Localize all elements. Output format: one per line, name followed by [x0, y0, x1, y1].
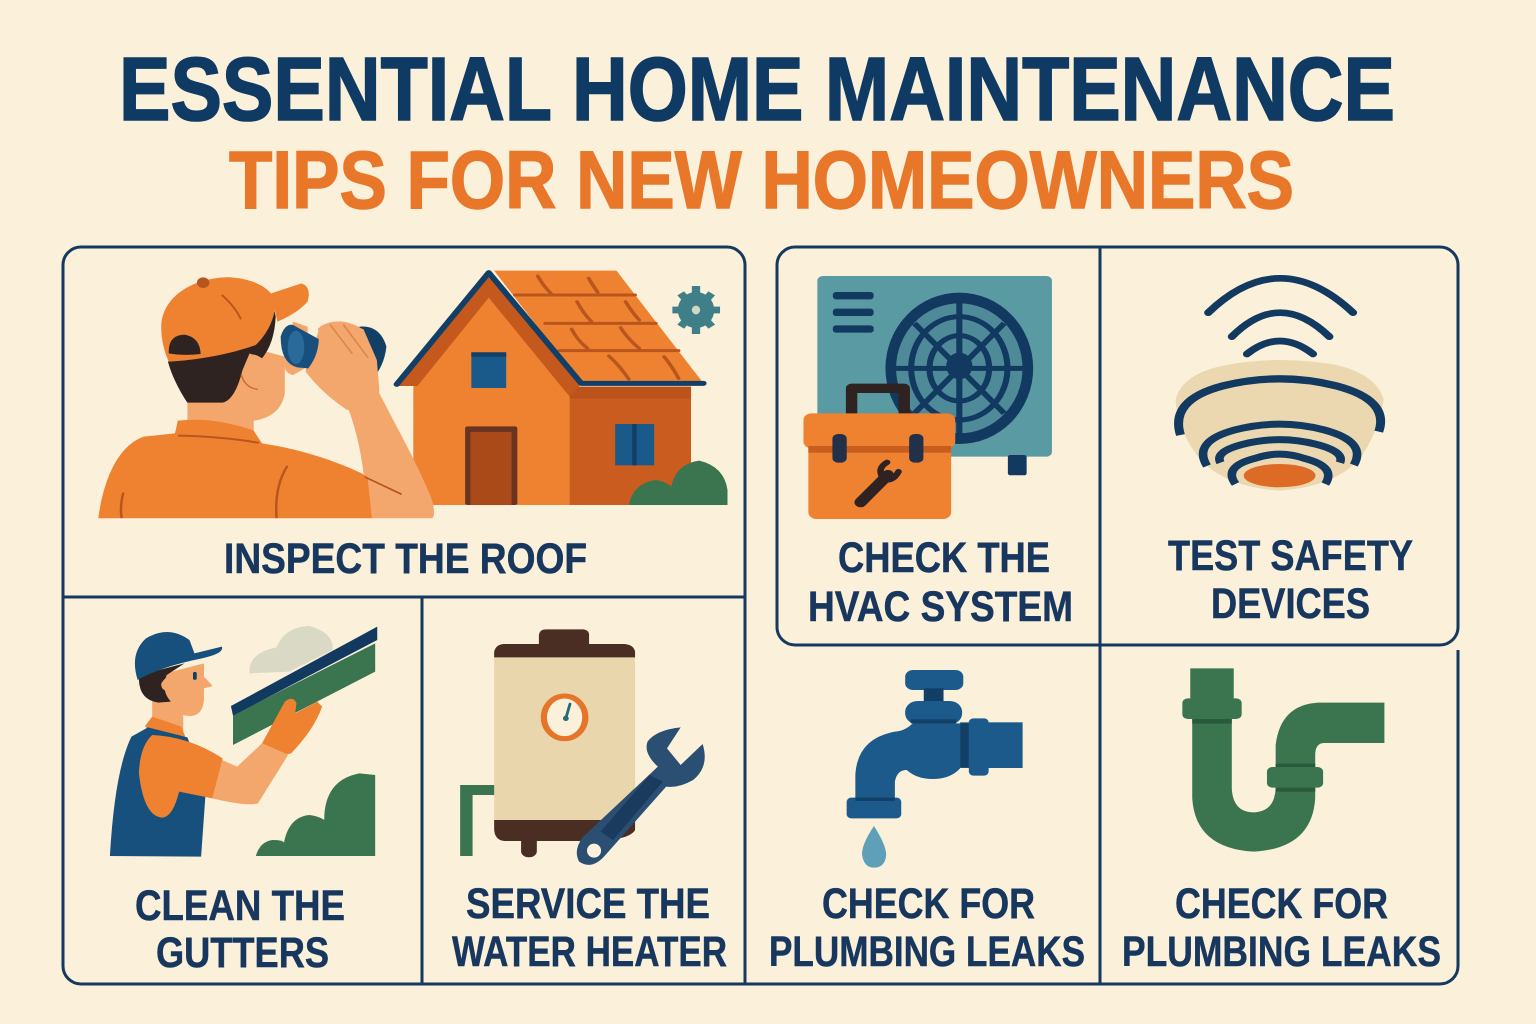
- icon: p-trap pipe: [1182, 668, 1384, 852]
- label: TEST SAFETY: [1168, 532, 1413, 580]
- label: PLUMBING LEAKS: [1122, 928, 1441, 976]
- label: HVAC SYSTEM: [808, 583, 1073, 631]
- panel: plumbing leaks faucet: [769, 670, 1085, 976]
- panel: safety devices: [1168, 278, 1413, 628]
- icon: smoke alarm: [1176, 278, 1384, 491]
- icon: hvac unit and toolbox: [803, 276, 1052, 519]
- label: CHECK FOR: [1175, 880, 1388, 928]
- label: WATER HEATER: [452, 928, 727, 976]
- label: SERVICE THE: [466, 880, 710, 928]
- icon: worker cleaning gutter: [110, 626, 377, 857]
- label: DEVICES: [1211, 580, 1370, 628]
- label: CHECK THE: [838, 534, 1050, 582]
- label: CHECK FOR: [822, 880, 1035, 928]
- panel: water heater: [452, 629, 727, 976]
- panel: hvac: [803, 276, 1073, 631]
- label: INSPECT THE ROOF: [224, 535, 587, 583]
- panel: plumbing leaks pipe: [1122, 668, 1441, 976]
- panel frame: grid lines: [63, 247, 1458, 984]
- label: PLUMBING LEAKS: [769, 928, 1085, 976]
- icon: dripping faucet: [847, 670, 1023, 868]
- panel: inspect the roof: [98, 271, 728, 583]
- icon: man with binoculars and house: [98, 271, 728, 518]
- panel: gutters: [110, 626, 377, 977]
- title: [119, 40, 1395, 226]
- title line 2: TIPS FOR NEW HOMEOWNERS: [229, 135, 1294, 226]
- label: CLEAN THE: [135, 882, 345, 930]
- label: GUTTERS: [156, 929, 329, 977]
- icon: water heater and wrench: [466, 629, 705, 865]
